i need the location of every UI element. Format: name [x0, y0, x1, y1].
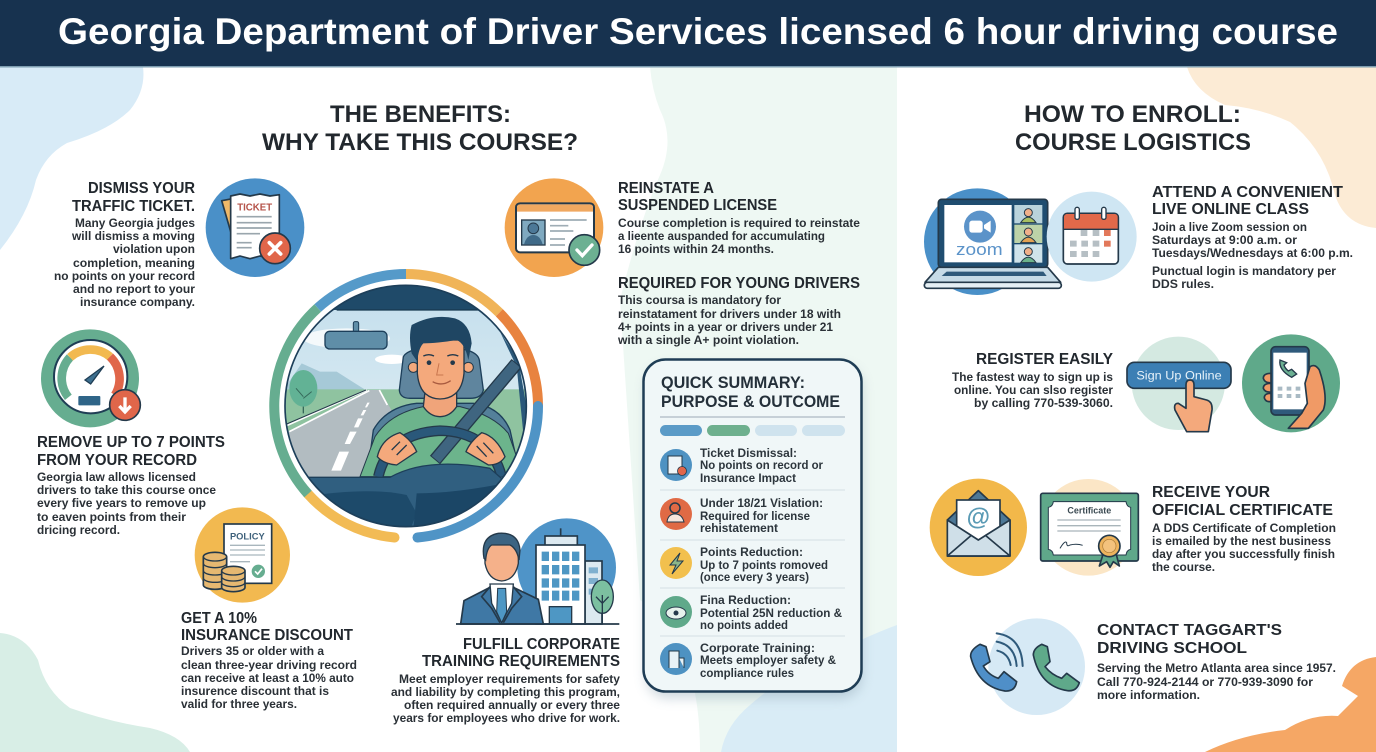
text block: fulfill corporate training: often required annually or every three [404, 698, 620, 712]
text block: contact taggart's: Serving the Metro Atlanta area since 1957. [1097, 661, 1336, 675]
text block: remove up to 7 points: every five years to remove up [37, 496, 206, 510]
text block: insurance discount: can receive at least a 10% auto [181, 671, 354, 685]
title: Georgia Department of Driver Services licensed 6 hour driving course [58, 11, 1338, 52]
text block: dismiss your traffic ticket: DISMISS YOUR [88, 180, 195, 197]
text block: contact taggart's: more information. [1097, 688, 1200, 702]
heading: how to enroll [1015, 101, 1251, 156]
text block: dismiss your traffic ticket: will dismiss a moving [71, 229, 195, 243]
text block: remove up to 7 points: Georgia law allows licensed [37, 470, 196, 484]
text block: required for young drivers: 4+ points in a year or drivers under 21 [618, 320, 833, 334]
row: ticket dismissal: Insurance Impact [700, 471, 796, 485]
text block: register easily: by calling 770-539-3060. [974, 396, 1113, 410]
panel: quick summary [644, 360, 862, 698]
icon: speedometer [41, 329, 140, 427]
tab pills [660, 425, 845, 436]
text block: required for young drivers [617, 275, 860, 347]
text block: remove up to 7 points: to eaven points from their [37, 510, 186, 524]
text block: remove up to 7 points: dricing record. [37, 523, 120, 537]
text block: remove up to 7 points: FROM YOUR RECORD [37, 452, 197, 469]
text block: reinstate a suspended license: 16 points within 24 months. [618, 242, 774, 256]
text block: register easily: REGISTER EASILY [976, 351, 1114, 368]
text block: dismiss your traffic ticket: and no report to your [73, 282, 195, 296]
row: corporate training: Corporate Training: [700, 641, 815, 655]
text block: attend a live online class: Join a live Zoom session on [1152, 220, 1307, 234]
text block: dismiss your traffic ticket: TRAFFIC TICKET. [72, 198, 195, 215]
text block: register easily [952, 351, 1114, 410]
text block: official certificate [1152, 484, 1336, 574]
text block: official certificate: RECEIVE YOUR [1152, 484, 1270, 501]
text block: dismiss your traffic ticket: violation upon [113, 242, 195, 256]
heading: how to enroll: HOW TO ENROLL: [1024, 101, 1241, 128]
text block: fulfill corporate training [391, 636, 620, 725]
text block: contact taggart's [1097, 622, 1336, 702]
text block: official certificate: is emailed by the nest business [1152, 534, 1331, 548]
summary heading [661, 374, 840, 411]
text block: fulfill corporate training: and liability by completing this program, [391, 685, 620, 699]
icon: corporate employee and building [456, 518, 619, 624]
icon: zoom laptop [924, 188, 1137, 295]
text block: fulfill corporate training: FULFILL CORPORATE [463, 636, 620, 653]
text block: official certificate: OFFICIAL CERTIFICATE [1152, 502, 1333, 519]
row: corporate training [660, 641, 836, 680]
text block: official certificate: day after you successfully finish [1152, 547, 1335, 561]
text block: fulfill corporate training: years for employees who drive for work. [393, 711, 620, 725]
icon: insurance policy and coins: POLICY [230, 531, 265, 541]
text block: required for young drivers: with a single A+ point violation. [617, 333, 799, 347]
title banner [0, 0, 1376, 68]
icon: insurance policy and coins [195, 507, 290, 603]
text block: dismiss your traffic ticket [54, 180, 195, 309]
row: points reduction [660, 545, 828, 584]
icon: ticket [206, 178, 304, 277]
row: ticket dismissal: No points on record or [700, 458, 823, 472]
text block: reinstate a suspended license: REINSTATE A [618, 180, 714, 197]
text block: required for young drivers: This coursa is mandatory for [618, 293, 781, 307]
row: under 18/21 violation: Required for license [700, 509, 810, 523]
text block: attend a live online class: LIVE ONLINE CLASS [1152, 201, 1309, 218]
text block: fulfill corporate training: Meet employer requirements for safety [399, 672, 620, 686]
text block: register easily: The fastest way to sign up is [952, 370, 1113, 384]
text block: official certificate: the course. [1152, 560, 1215, 574]
row: under 18/21 violation: Under 18/21 Vislation: [700, 496, 823, 510]
summary heading: QUICK SUMMARY: [661, 374, 805, 392]
text block: insurance discount: INSURANCE DISCOUNT [181, 627, 354, 644]
text block: dismiss your traffic ticket: insurance company. [80, 295, 195, 309]
text block: attend a live online class [1152, 184, 1353, 291]
text block: reinstate a suspended license: SUSPENDED LICENSE [618, 197, 777, 214]
text block: insurance discount: GET A 10% [181, 610, 257, 627]
text block: insurance discount: valid for three years. [181, 697, 297, 711]
text block: official certificate: A DDS Certificate of Completion [1152, 521, 1336, 535]
text block: attend a live online class: DDS rules. [1152, 277, 1214, 291]
text block: insurance discount: Drivers 35 or older with a [181, 644, 324, 658]
icon: email envelope: @ [967, 504, 990, 531]
text block: remove up to 7 points: drivers to take this course once [37, 483, 216, 497]
icon: certificate: Certificate [1067, 505, 1111, 515]
text block: attend a live online class: Saturdays at 9:00 a.m. or [1152, 233, 1297, 247]
row: corporate training: compliance rules [700, 666, 794, 680]
text block: insurance discount [181, 610, 357, 711]
row: fine reduction: no points added [700, 618, 788, 632]
text block: required for young drivers: REQUIRED FOR YOUNG DRIVERS [618, 275, 860, 292]
text block: dismiss your traffic ticket: no points on your record [54, 269, 195, 283]
text block: attend a live online class: Punctual login is mandatory per [1152, 264, 1336, 278]
icon: ticket: TICKET [237, 203, 272, 214]
text block: contact taggart's: Call 770-924-2144 or 770-939-3090 for [1097, 675, 1313, 689]
text block: reinstate a suspended license: a lieente auspanded for accumulating [618, 229, 825, 243]
text block: remove up to 7 points: REMOVE UP TO 7 POINTS [37, 434, 225, 451]
text block: reinstate a suspended license [618, 180, 860, 256]
text block: register easily: online. You can slso register [954, 383, 1113, 397]
icon: phone in hand [1242, 334, 1340, 432]
heading: benefits: WHY TAKE THIS COURSE? [262, 129, 578, 156]
text block: insurance discount: insurence discount that is [181, 684, 329, 698]
text block: dismiss your traffic ticket: completion, meaning [73, 256, 195, 270]
icon: sign up online button [1127, 337, 1231, 432]
row: fine reduction: Fina Reduction: [700, 593, 791, 607]
text block: required for young drivers: reinstatament for drivers under 18 with [618, 307, 841, 321]
row: under 18/21 violation: rehistatement [700, 521, 778, 535]
row: corporate training: Meets employer safety & [700, 653, 836, 667]
row: ticket dismissal: Ticket Dismissal: [700, 446, 797, 460]
text block: fulfill corporate training: TRAINING REQUIREMENTS [422, 653, 620, 670]
heading: benefits: THE BENEFITS: [330, 101, 511, 128]
row: points reduction: Up to 7 points romoved [700, 558, 828, 572]
icon: email envelope [930, 479, 1027, 576]
icon: sign up online button: Sign Up Online [1136, 369, 1222, 383]
row: points reduction: (once every 3 years) [700, 570, 809, 584]
row: fine reduction: Potential 25N reduction & [700, 606, 842, 620]
text block: reinstate a suspended license: Course completion is required to reinstate [618, 216, 860, 230]
icon: zoom laptop: zoom [956, 240, 1003, 259]
icon: certificate [1040, 479, 1138, 576]
illustration: driver in car [280, 283, 533, 530]
text block: contact taggart's: DRIVING SCHOOL [1097, 640, 1247, 657]
text block: dismiss your traffic ticket: Many Georgia judges [75, 216, 195, 230]
text block: contact taggart's: CONTACT TAGGART'S [1097, 622, 1282, 639]
text block: attend a live online class: ATTEND A CONVENIENT [1152, 184, 1344, 201]
row: under 18/21 violation [660, 496, 823, 535]
text block: attend a live online class: Tuesdays/Wednesdays at 6:00 p.m. [1152, 246, 1353, 260]
text block: insurance discount: clean three-year driving record [181, 658, 357, 672]
icon: suspended license card [505, 178, 603, 277]
row: fine reduction [660, 593, 842, 632]
text block: remove up to 7 points [37, 434, 225, 537]
row: ticket dismissal [660, 446, 823, 485]
row: points reduction: Points Reduction: [700, 545, 803, 559]
summary heading: PURPOSE & OUTCOME [661, 393, 840, 411]
heading: benefits [262, 101, 578, 156]
icon: phones [971, 618, 1085, 715]
heading: how to enroll: COURSE LOGISTICS [1015, 129, 1251, 156]
central ring [274, 274, 538, 538]
